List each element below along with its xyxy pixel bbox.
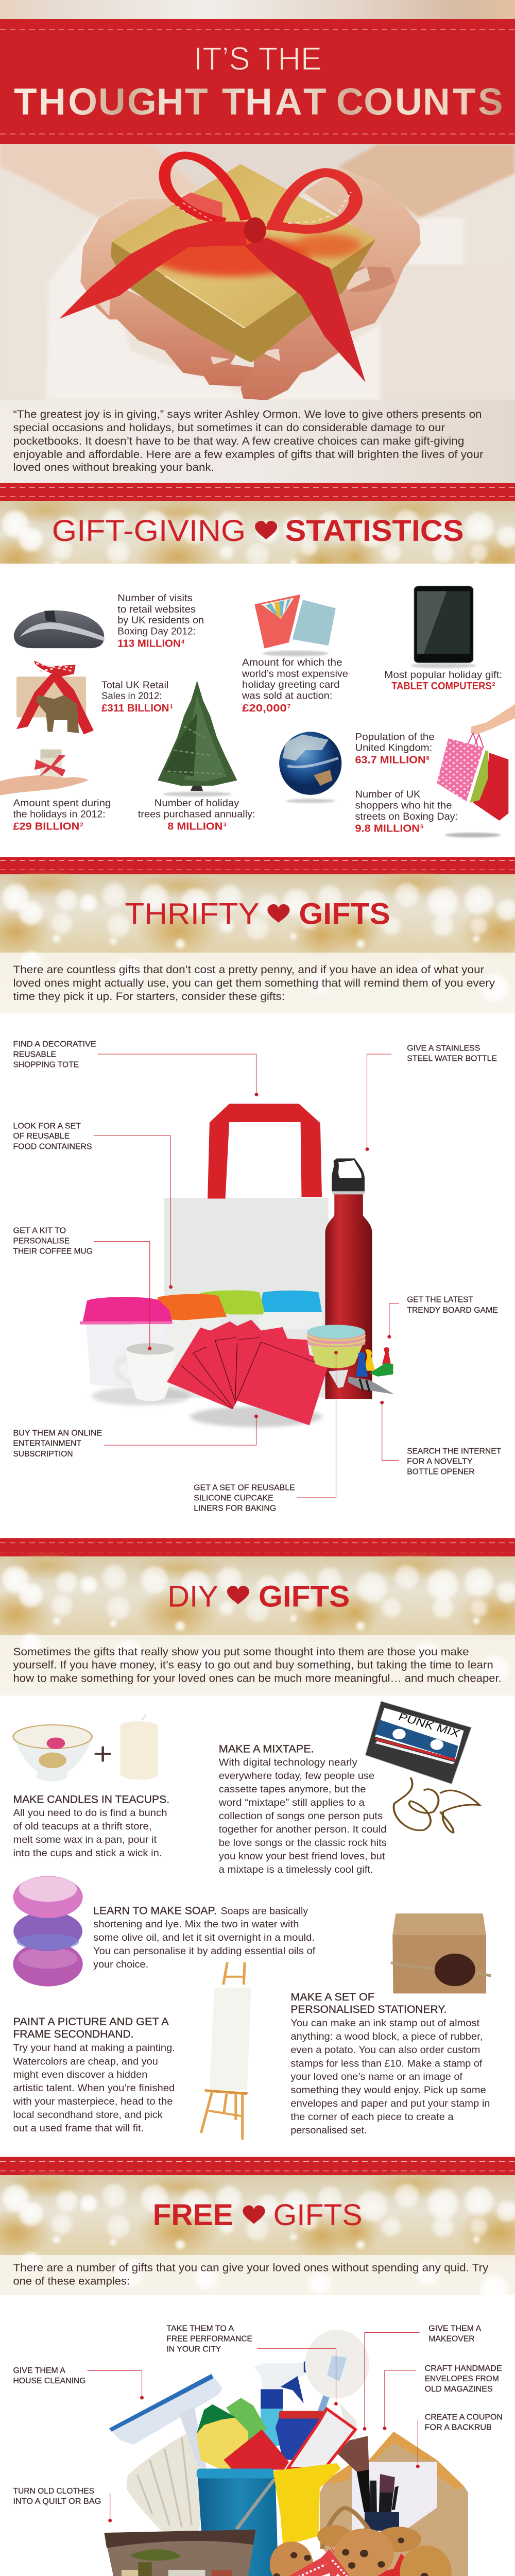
callout: entertainment subscription: SUBSCRIPTION	[13, 1450, 73, 1459]
stat: UK retail sales: 1	[170, 704, 173, 710]
stat: holiday spending: 2	[80, 822, 83, 828]
text block: paint a picture: out a used frame that will fit.	[13, 2123, 144, 2134]
ribbon	[173, 192, 222, 222]
callout: house cleaning: GIVE THEM A	[13, 2366, 65, 2375]
quilted bag	[104, 2530, 256, 2576]
icon: stack of soaps	[13, 1876, 83, 1987]
stat: tablet: 2	[492, 681, 495, 687]
icon: globe	[279, 732, 341, 803]
callout: entertainment subscription: ENTERTAINMENT	[13, 1439, 81, 1448]
panel: thrifty gifts header: THRIFTY	[125, 897, 260, 930]
text block: paint a picture: PAINT A PICTURE AND GET A	[13, 2016, 169, 2028]
text block: candles in teacups: into the cups and stick a wick in.	[13, 1848, 162, 1859]
stat: greeting card: 7	[287, 704, 290, 710]
illustration: thrifty gifts collage	[80, 1054, 399, 1498]
callout: board game: TRENDY BOARD GAME	[407, 1306, 498, 1315]
callout: backrub coupon	[425, 2413, 503, 2432]
text block: stationery	[290, 1991, 490, 2136]
callout: makeover: GIVE THEM A	[428, 2325, 482, 2333]
food containers	[80, 1290, 322, 1387]
stat: tablet	[384, 670, 502, 692]
callout: food containers: LOOK FOR A SET	[13, 1122, 81, 1130]
text block: soap: shortening and lye. Mix the two in water with	[93, 1919, 299, 1930]
text block: candles in teacups: of old teacups at a thrift store,	[13, 1821, 151, 1832]
stat: retail website visits: to retail websites	[117, 604, 196, 615]
stat: UK retail sales: Sales in 2012:	[101, 691, 162, 702]
text block: stationery: even a potato. You can also order custom	[290, 2045, 480, 2056]
text block: candles in teacups: All you need to do is find a bunch	[13, 1808, 167, 1819]
text block: soap	[93, 1905, 316, 1970]
callout lines	[88, 2333, 420, 2576]
mop	[126, 2428, 207, 2532]
envelope with makeup	[320, 2432, 468, 2576]
icon: cassette tape	[365, 1701, 479, 1833]
illustration: free gifts collage	[88, 2330, 468, 2576]
squeegee	[109, 2374, 222, 2445]
text block: paint a picture: Watercolors are cheap, and you	[13, 2057, 158, 2067]
text block: mixtape: you know your best friend loves, but	[219, 1851, 385, 1862]
stat: UK population	[355, 732, 435, 766]
gift box	[111, 239, 376, 363]
stat: UK population: 6	[426, 755, 430, 761]
stat: boxing day shoppers: shoppers who hit the	[355, 800, 452, 811]
stat: holiday spending	[13, 798, 111, 833]
stat: holiday trees: Number of holiday	[154, 798, 239, 809]
stat: holiday trees: 8 MILLION	[167, 821, 222, 833]
spray bottle	[261, 2409, 283, 2446]
text block: mixtape: MAKE A MIXTAPE.	[219, 1743, 314, 1755]
panel: intro: “The greatest joy is in giving,” says writer Ashley Ormon. We love to give others presents on	[13, 409, 482, 420]
panel: intro: pocketbooks. It doesn’t have to be that way. A few creative choices can make gift-giving	[13, 435, 465, 447]
text block: paint a picture: might even discover a hidden	[13, 2070, 147, 2080]
hero photo: hands holding a gold gift	[0, 0, 515, 400]
text block: stationery: the corner of each piece to create a	[290, 2112, 454, 2123]
text block: soap: LEARN TO MAKE SOAP.	[93, 1905, 217, 1917]
text block: paint a picture: artistic talent. When you’re finished	[13, 2083, 175, 2094]
stat: boxing day shoppers: Number of UK	[355, 789, 421, 800]
stat: greeting card: was sold at auction:	[242, 691, 332, 702]
stat: UK retail sales: £311 BILLION	[101, 703, 169, 714]
text block: stationery: anything: a wood block, a piece of rubber,	[290, 2031, 483, 2042]
stat: boxing day shoppers	[355, 789, 458, 834]
callout: cupcake liners	[194, 1483, 295, 1513]
callout: bottle opener	[407, 1447, 501, 1477]
callout: food containers	[13, 1122, 92, 1151]
callout: water bottle: GIVE A STAINLESS	[407, 1044, 480, 1053]
text block: paint a picture: FRAME SECONDHAND.	[13, 2028, 134, 2040]
panel: thrifty gifts header: GIFTS	[299, 897, 390, 930]
callout: bottle opener: SEARCH THE INTERNET	[407, 1447, 501, 1455]
text block: mixtape: word “mixtape” still applies to a	[218, 1798, 365, 1808]
panel: thrifty gifts header: There are countless gifts that don’t cost a pretty penny, and if you have an idea of what your	[13, 964, 484, 976]
cleaning bucket, supplies, envelope, bag and muffins	[104, 2330, 468, 2576]
callout: entertainment subscription	[13, 1429, 102, 1459]
icon: greeting card	[254, 595, 338, 656]
callout: shopping tote: REUSABLE	[13, 1050, 56, 1059]
callout: coffee mug: GET A KIT TO	[13, 1226, 66, 1235]
icon: hand holding rolled money	[0, 749, 89, 795]
text block: stationery: You can make an ink stamp out of almost	[290, 2018, 480, 2029]
stat: holiday trees	[138, 798, 255, 833]
text block: stationery: personalised set.	[290, 2125, 367, 2136]
ribbon band 2	[0, 857, 515, 874]
stat: retail website visits	[117, 593, 204, 650]
panel: intro: special occasions and holidays, but sometimes it can do considerable damage to our	[13, 422, 445, 434]
callout: cupcake liners: GET A SET OF REUSABLE	[194, 1483, 295, 1492]
text block: mixtape	[218, 1743, 387, 1875]
panel: thrifty gifts header	[0, 869, 515, 1013]
stat: UK population: United Kingdom:	[355, 743, 432, 754]
stat: retail website visits: Boxing Day 2012:	[117, 626, 196, 637]
yellow bottle	[197, 2404, 248, 2470]
text block: stationery: PERSONALISED STATIONERY.	[290, 2004, 447, 2015]
title banner: IT’S THE	[194, 41, 322, 77]
text block: mixtape: cassette tapes anymore, but the	[219, 1784, 366, 1795]
tote bag	[164, 1104, 329, 1398]
bucket	[198, 2477, 279, 2576]
stat: holiday trees: trees purchased annually:	[138, 809, 255, 820]
callout: free performance: FREE PERFORMANCE	[166, 2334, 252, 2343]
callout: handmade envelopes: OLD MAGAZINES	[425, 2385, 493, 2394]
green cloth	[226, 2398, 267, 2441]
ribbon band 4	[0, 2157, 515, 2175]
panel: intro: loved ones without breaking your bank.	[13, 462, 214, 473]
icon: kraft box with wax seal	[391, 1913, 491, 1993]
stat: retail website visits: 113 MILLION	[117, 638, 181, 650]
panel: free gifts header	[0, 2170, 515, 2316]
panel: statistics	[0, 586, 515, 838]
stat: holiday trees: 3	[224, 822, 227, 828]
callout: water bottle	[407, 1044, 497, 1063]
panel: thrifty gifts header: time they pick it up. For starters, consider these gifts:	[13, 991, 285, 1003]
silicone cupcake liners	[307, 1325, 365, 1368]
panel: DIY gifts header: DIY	[167, 1580, 218, 1613]
stat: retail website visits: Number of visits	[117, 593, 193, 604]
water bottle	[325, 1158, 372, 1399]
stat: UK population: 63.7 MILLION	[355, 755, 426, 766]
callout: bottle opener: FOR A NOVELTY	[407, 1457, 473, 1466]
glove	[273, 2463, 341, 2545]
panel: intro: enjoyable and affordable. Here are a few examples of gifts that will brighten the lives of your	[13, 449, 483, 461]
text block: mixtape: everywhere today, few people use	[219, 1771, 374, 1782]
duster	[317, 2388, 332, 2414]
icon: easel with canvas	[201, 1962, 251, 2140]
stat: UK retail sales: Total UK Retail	[101, 680, 168, 691]
coffee mug	[92, 1343, 191, 1405]
text block: soap: Soaps are basically	[221, 1906, 308, 1917]
text block: candles in teacups	[13, 1794, 169, 1859]
text block: mixtape: a mixtape is a timelessly cool gift.	[219, 1865, 373, 1875]
icon: shopping bags	[437, 704, 515, 838]
text block: candles in teacups: MAKE CANDLES IN TEACUPS.	[13, 1794, 169, 1805]
stat: holiday spending: the holidays in 2012:	[13, 809, 106, 820]
panel: free gifts header: one of these examples:	[13, 2276, 130, 2287]
callout: food containers: FOOD CONTAINERS	[13, 1143, 92, 1151]
sponge	[224, 2429, 289, 2470]
stat: UK retail sales	[101, 680, 173, 714]
callout: entertainment subscription: BUY THEM AN ONLINE	[13, 1429, 102, 1438]
stat: boxing day shoppers: 9.8 MILLION	[355, 823, 420, 834]
panel: DIY gifts header: how to make something for your loved ones can be much more meaningful… and much cheaper.	[13, 1672, 502, 1684]
callout: board game: GET THE LATEST	[407, 1296, 473, 1304]
callout: backrub coupon: CREATE A COUPON	[425, 2413, 503, 2421]
icon: tablet	[410, 586, 476, 668]
text block: mixtape: be love songs or the classic rock hits	[219, 1838, 387, 1849]
callout: handmade envelopes: ENVELOPES FROM	[425, 2375, 499, 2383]
text block: stationery: something they would enjoy. Pick up some	[290, 2085, 486, 2096]
text block: paint a picture: with your masterpiece, head to the	[12, 2096, 173, 2107]
callout: coffee mug	[13, 1226, 93, 1256]
text block: stationery: stamps for less than £10. Make a stamp of	[290, 2059, 483, 2070]
callout: cupcake liners: SILICONE CUPCAKE	[194, 1494, 273, 1502]
text block: soap: your choice.	[93, 1959, 148, 1970]
callout lines	[94, 1054, 399, 1498]
callout: free performance	[166, 2325, 252, 2353]
callout: water bottle: STEEL WATER BOTTLE	[407, 1055, 497, 1063]
text block: candles in teacups: melt some wax in a pan, pour it	[13, 1835, 157, 1845]
stat: retail website visits: by UK residents on	[117, 615, 204, 626]
callout: free performance: TAKE THEM TO A	[166, 2325, 234, 2333]
stat: greeting card: world’s most expensive	[242, 669, 348, 680]
panel: thrifty gifts header: loved ones might actually use, you can get them something that will remind them of you every	[13, 977, 495, 989]
title banner	[0, 19, 515, 144]
stat: boxing day shoppers: 5	[420, 824, 423, 830]
panel: free gifts header: FREE	[153, 2198, 233, 2232]
heading: gift-giving statistics: GIFT-GIVING	[52, 514, 246, 548]
callout: shopping tote: FIND A DECORATIVE	[13, 1040, 96, 1049]
text block: soap: some olive oil, and let it sit overnight in a mould.	[93, 1933, 315, 1943]
stat: greeting card: £20,000	[242, 703, 287, 714]
stat: tablet: Most popular holiday gift:	[384, 670, 502, 681]
bottle opener	[329, 1369, 394, 1394]
stat: greeting card: Amount for which the	[242, 657, 342, 668]
panel: free gifts header: GIFTS	[273, 2198, 363, 2232]
stat: greeting card	[242, 657, 348, 714]
callout: bottle opener: BOTTLE OPENER	[407, 1468, 475, 1477]
callout: board game	[407, 1296, 498, 1315]
panel: DIY gifts header: yourself. If you have money, it’s easy to go out and buy something, but taking the time to learn	[13, 1659, 493, 1671]
panel: DIY gifts header: GIFTS	[259, 1580, 350, 1613]
panel: free gifts header: There are a number of gifts that you can give your loved ones without spending any quid. Try	[13, 2262, 489, 2274]
callout: handmade envelopes: CRAFT HANDMADE	[425, 2364, 502, 2373]
left hand	[80, 199, 256, 386]
callout: shopping tote	[13, 1040, 96, 1069]
text block: paint a picture	[12, 2016, 175, 2134]
text block: soap: You can personalise it by adding essential oils of	[93, 1946, 316, 1957]
panel: intro	[0, 400, 515, 483]
icon: wrapped present with reindeer	[16, 661, 94, 735]
ribbon band 1	[0, 483, 515, 501]
icon: cassette tape: PUNK MIX	[397, 1710, 462, 1739]
icon: teacup plus candle	[13, 1715, 158, 1782]
ticket	[288, 2409, 355, 2469]
text block: paint a picture: Try your hand at making a painting.	[13, 2043, 175, 2054]
stat: greeting card: holiday greeting card	[242, 680, 340, 690]
panel: DIY gifts header: Sometimes the gifts that really show you put some thought into them are those you make	[13, 1646, 469, 1658]
text block: paint a picture: local secondhand store, and pick	[13, 2110, 163, 2121]
title banner: THOUGHT THAT COUNTS	[14, 81, 503, 123]
text block: stationery: your loved one’s name or an image of	[290, 2072, 463, 2082]
text block: stationery: MAKE A SET OF	[290, 1991, 374, 2003]
icon: christmas tree	[158, 681, 237, 796]
board game pieces	[356, 1347, 393, 1377]
callout: quilt or bag: TURN OLD CLOTHES	[13, 2487, 94, 2496]
heading: gift-giving statistics: STATISTICS	[285, 514, 464, 548]
stat: holiday spending: Amount spent during	[13, 798, 111, 809]
callout: food containers: OF REUSABLE	[13, 1132, 70, 1141]
jar	[276, 2414, 323, 2460]
stat: UK population: Population of the	[355, 732, 435, 743]
callout: house cleaning	[13, 2366, 85, 2385]
red envelopes	[167, 1320, 329, 1427]
stat: holiday spending: £29 BILLION	[13, 821, 79, 833]
callout: quilt or bag	[13, 2487, 101, 2506]
ribbon band 3	[0, 1538, 515, 1556]
callout: coffee mug: THEIR COFFEE MUG	[13, 1247, 93, 1256]
stat: boxing day shoppers: streets on Boxing Day:	[355, 811, 458, 822]
stat: retail website visits: 4	[181, 639, 185, 645]
text block: mixtape: together for another person. It could	[219, 1824, 387, 1835]
panel: DIY gifts header	[0, 1551, 515, 1696]
callout: quilt or bag: INTO A QUILT OR BAG	[13, 2497, 101, 2506]
callout: makeover: MAKEOVER	[428, 2334, 475, 2343]
icon: computer mouse	[14, 611, 105, 648]
callout: makeover	[428, 2325, 482, 2343]
callout: house cleaning: HOUSE CLEANING	[13, 2377, 85, 2385]
text block: stationery: envelopes and paper and put your stamp in	[290, 2098, 490, 2109]
callout: shopping tote: SHOPPING TOTE	[13, 1060, 79, 1069]
callout: free performance: IN YOUR CITY	[166, 2345, 221, 2353]
stat: tablet: TABLET COMPUTERS	[391, 681, 492, 692]
callout: cupcake liners: LINERS FOR BAKING	[194, 1504, 276, 1513]
right hand	[241, 168, 421, 400]
callout: backrub coupon: FOR A BACKRUB	[425, 2423, 492, 2432]
heading: gift-giving statistics	[0, 501, 515, 564]
text block: mixtape: With digital technology nearly	[219, 1757, 357, 1768]
callout: handmade envelopes	[425, 2364, 502, 2394]
callout: coffee mug: PERSONALISE	[13, 1236, 70, 1245]
text block: mixtape: collection of songs one person puts	[219, 1811, 383, 1822]
